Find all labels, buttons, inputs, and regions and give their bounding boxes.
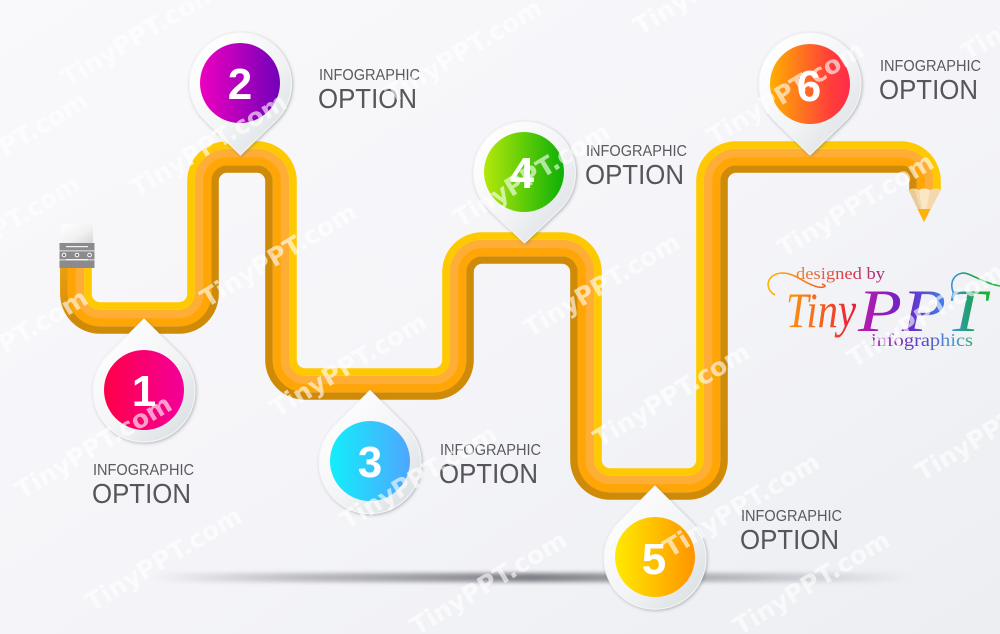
pin 4	[474, 122, 576, 243]
watermark: TinyPPT.com repeated: TinyPPT.com	[80, 501, 247, 617]
label 1: OPTION	[92, 478, 191, 509]
watermark: TinyPPT.com repeated: TinyPPT.com	[125, 87, 292, 203]
logo: designed by TinyPPT infographics: designed by	[796, 264, 886, 283]
label 6	[879, 58, 981, 105]
pin 3: 3	[358, 438, 382, 487]
pin 4: 4	[510, 149, 535, 198]
pin 3	[319, 390, 421, 514]
pin 1	[93, 319, 195, 442]
icon: pencil tip	[908, 188, 941, 222]
label 3	[439, 442, 541, 489]
logo: designed by TinyPPT infographics: infographics	[871, 330, 973, 350]
pin 6	[759, 33, 861, 155]
pin 1: 1	[132, 367, 156, 416]
watermark: TinyPPT.com repeated: TinyPPT.com	[588, 337, 755, 453]
label 1: INFOGRAPHIC	[93, 462, 194, 479]
label 3: INFOGRAPHIC	[440, 442, 541, 459]
pin 5	[604, 486, 706, 609]
floor shadow	[150, 573, 910, 582]
logo: designed by TinyPPT infographics	[768, 264, 1000, 350]
watermark: TinyPPT.com repeated: TinyPPT.com	[335, 419, 502, 535]
label 6: OPTION	[879, 74, 978, 105]
label 4: OPTION	[585, 159, 684, 190]
watermark: TinyPPT.com repeated: TinyPPT.com	[702, 35, 869, 151]
icon: pencil eraser	[60, 224, 94, 268]
watermark: TinyPPT.com repeated: TinyPPT.com	[658, 447, 825, 563]
watermark: TinyPPT.com repeated: TinyPPT.com	[772, 147, 939, 263]
pin 6: 6	[797, 62, 821, 111]
label 4	[585, 143, 687, 190]
label 4: INFOGRAPHIC	[586, 143, 687, 160]
label 5: OPTION	[740, 524, 839, 555]
watermark: TinyPPT.com repeated: TinyPPT.com	[518, 227, 685, 343]
watermark: TinyPPT.com repeated: TinyPPT.com	[195, 197, 362, 313]
label 2: OPTION	[318, 83, 417, 114]
watermark: TinyPPT.com repeated: TinyPPT.com	[10, 389, 177, 505]
label 6: INFOGRAPHIC	[880, 58, 981, 75]
label 3: OPTION	[439, 458, 538, 489]
logo: designed by TinyPPT infographics: PPT	[857, 278, 990, 344]
label 1	[92, 462, 194, 509]
label 5	[740, 508, 842, 555]
watermark: TinyPPT.com repeated: TinyPPT.com	[448, 117, 615, 233]
pin 5: 5	[642, 535, 666, 584]
label 2	[318, 67, 420, 114]
label 2: INFOGRAPHIC	[319, 67, 420, 84]
label 5: INFOGRAPHIC	[741, 508, 842, 525]
pin 2: 2	[228, 60, 252, 109]
pencil body	[64, 145, 937, 496]
pin 2	[190, 33, 292, 155]
logo: designed by TinyPPT infographics: Tiny	[786, 282, 857, 338]
watermark: TinyPPT.com repeated: TinyPPT.com	[265, 307, 432, 423]
